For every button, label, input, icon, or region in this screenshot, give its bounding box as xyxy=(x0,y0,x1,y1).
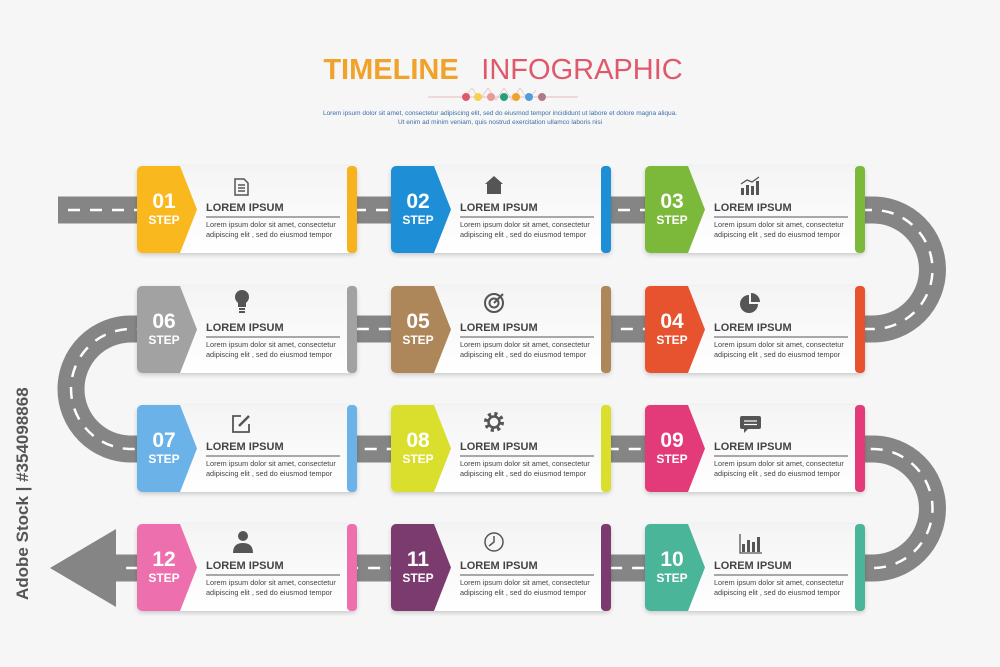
card 06: STEP xyxy=(148,333,180,347)
card 04: LOREM IPSUM xyxy=(714,322,792,334)
card 12 xyxy=(137,524,357,611)
card 03: STEP xyxy=(656,213,688,227)
card 06 xyxy=(137,286,357,373)
card 01: adipiscing elit , sed do eiusmod tempor xyxy=(206,230,333,239)
card 12: LOREM IPSUM xyxy=(206,560,284,572)
card 11: STEP xyxy=(402,571,434,585)
card 10: LOREM IPSUM xyxy=(714,560,792,572)
card 11: adipiscing elit , sed do eiusmod tempor xyxy=(460,588,587,597)
card 05: 05 xyxy=(406,310,430,333)
card 02 xyxy=(391,166,611,253)
card 10: Lorem ipsum dolor sit amet, consectetur xyxy=(714,578,844,587)
road xyxy=(58,210,933,568)
icon: bar chart xyxy=(741,177,759,195)
card 05: STEP xyxy=(402,333,434,347)
card 02: adipiscing elit , sed do eiusmod tempor xyxy=(460,230,587,239)
icon: bar chart xyxy=(740,534,762,553)
icon: document xyxy=(235,179,248,195)
arrow head xyxy=(50,529,116,607)
card 11: 11 xyxy=(407,548,429,571)
card 10: adipiscing elit , sed do eiusmod tempor xyxy=(714,588,841,597)
icon: target xyxy=(485,294,503,312)
card 05: adipiscing elit , sed do eiusmod tempor xyxy=(460,350,587,359)
card 03: 03 xyxy=(660,190,684,213)
card 11: Lorem ipsum dolor sit amet, consectetur xyxy=(460,578,590,587)
card 08: 08 xyxy=(406,429,430,452)
card 01: STEP xyxy=(148,213,180,227)
card 07: LOREM IPSUM xyxy=(206,441,284,453)
icon: home xyxy=(485,176,503,194)
card 02: STEP xyxy=(402,213,434,227)
card 01: LOREM IPSUM xyxy=(206,202,284,214)
card 03: adipiscing elit , sed do eiusmod tempor xyxy=(714,230,841,239)
card 01 xyxy=(137,166,357,253)
card 05: LOREM IPSUM xyxy=(460,322,538,334)
card 06: adipiscing elit , sed do eiusmod tempor xyxy=(206,350,333,359)
icon: gear xyxy=(486,414,502,430)
card 01: Lorem ipsum dolor sit amet, consectetur xyxy=(206,220,336,229)
subtitle text: Lorem ipsum dolor sit amet, consectetur adipiscing elit, sed do eiusmod tempor incididunt ut labore et dolore magna aliqua. xyxy=(323,110,677,117)
card 09: LOREM IPSUM xyxy=(714,441,792,453)
card 02: LOREM IPSUM xyxy=(460,202,538,214)
icon: clock xyxy=(485,533,503,551)
card 10: STEP xyxy=(656,571,688,585)
card 01: 01 xyxy=(152,190,176,213)
card 12: Lorem ipsum dolor sit amet, consectetur xyxy=(206,578,336,587)
card 09: STEP xyxy=(656,452,688,466)
icon: edit xyxy=(233,416,249,432)
card 06: Lorem ipsum dolor sit amet, consectetur xyxy=(206,340,336,349)
card 07: adipiscing elit , sed do eiusmod tempor xyxy=(206,469,333,478)
card 08 xyxy=(391,405,611,492)
card 07: STEP xyxy=(148,452,180,466)
card 12: STEP xyxy=(148,571,180,585)
card 05 xyxy=(391,286,611,373)
watermark id: Adobe Stock | #354098868 xyxy=(13,387,32,600)
card 10: 10 xyxy=(660,548,684,571)
card 03: LOREM IPSUM xyxy=(714,202,792,214)
decorative dots divider xyxy=(428,88,578,101)
card 02: Lorem ipsum dolor sit amet, consectetur xyxy=(460,220,590,229)
card 04: 04 xyxy=(660,310,684,333)
card 03 xyxy=(645,166,865,253)
card 09: 09 xyxy=(660,429,684,452)
title: TIMELINE xyxy=(323,54,459,86)
card 04: Lorem ipsum dolor sit amet, consectetur xyxy=(714,340,844,349)
title: INFOGRAPHIC xyxy=(481,54,683,86)
card 07: 07 xyxy=(152,429,176,452)
icon: user xyxy=(233,531,253,553)
card 11: LOREM IPSUM xyxy=(460,560,538,572)
card 06: 06 xyxy=(152,310,176,333)
card 04 xyxy=(645,286,865,373)
subtitle text: Ut enim ad minim veniam, quis nostrud exercitation ullamco laboris nisi xyxy=(398,119,602,126)
card 04: adipiscing elit , sed do eiusmod tempor xyxy=(714,350,841,359)
card 06: LOREM IPSUM xyxy=(206,322,284,334)
card 08: Lorem ipsum dolor sit amet, consectetur xyxy=(460,459,590,468)
card 08: LOREM IPSUM xyxy=(460,441,538,453)
card 04: STEP xyxy=(656,333,688,347)
icon: pie chart xyxy=(740,293,760,313)
card 07: Lorem ipsum dolor sit amet, consectetur xyxy=(206,459,336,468)
icon: bulb xyxy=(235,290,249,313)
title xyxy=(323,54,683,86)
card 03: Lorem ipsum dolor sit amet, consectetur xyxy=(714,220,844,229)
icon: chat xyxy=(740,416,761,433)
card 05: Lorem ipsum dolor sit amet, consectetur xyxy=(460,340,590,349)
card 02: 02 xyxy=(406,190,430,213)
card 11 xyxy=(391,524,611,611)
card 09 xyxy=(645,405,865,492)
card 08: adipiscing elit , sed do eiusmod tempor xyxy=(460,469,587,478)
card 07 xyxy=(137,405,357,492)
card 09: adipiscing elit , sed do eiusmod tempor xyxy=(714,469,841,478)
card 12: adipiscing elit , sed do eiusmod tempor xyxy=(206,588,333,597)
subtitle text xyxy=(323,110,677,126)
card 09: Lorem ipsum dolor sit amet, consectetur xyxy=(714,459,844,468)
card 10 xyxy=(645,524,865,611)
card 12: 12 xyxy=(152,548,176,571)
card 08: STEP xyxy=(402,452,434,466)
